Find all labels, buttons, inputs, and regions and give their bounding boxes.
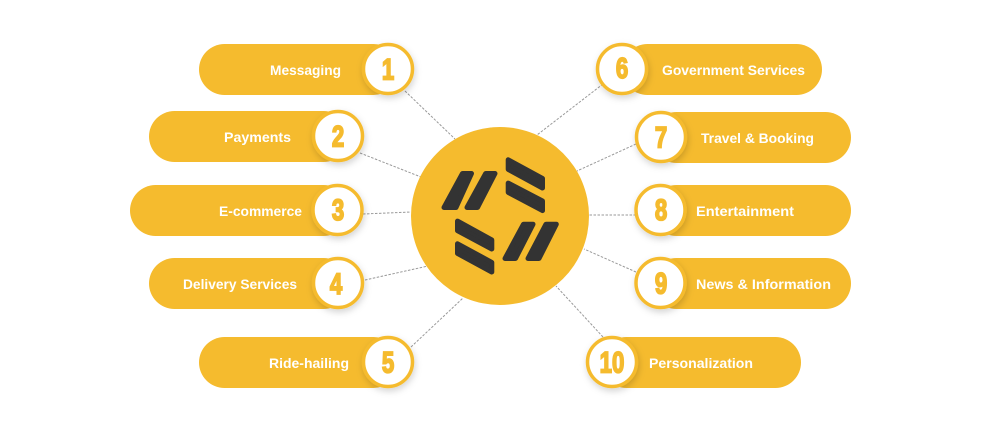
item 6: Government Services: 6 xyxy=(616,53,628,85)
item 3: E-commerce: 3 xyxy=(332,193,344,227)
item 2: Payments: 2 xyxy=(332,119,344,153)
item 9: News & Information: 9 xyxy=(655,266,667,300)
item 8: Entertainment xyxy=(636,185,851,236)
item 9: News & Information xyxy=(636,258,851,309)
item 3: E-commerce xyxy=(130,185,362,236)
item 3: E-commerce: E-commerce xyxy=(219,203,302,219)
item 10: Personalization: Personalization xyxy=(649,355,753,371)
item 5: Ride-hailing: Ride-hailing xyxy=(269,355,349,371)
item 10: Personalization: 10 xyxy=(600,345,624,379)
item 1: Messaging: Messaging xyxy=(270,62,341,78)
item 1: Messaging: 1 xyxy=(382,52,394,86)
item 7: Travel & Booking: Travel & Booking xyxy=(701,130,814,146)
item 2: Payments xyxy=(149,111,362,162)
item 4: Delivery Services: Delivery Services xyxy=(183,276,297,292)
item 6: Government Services xyxy=(598,44,822,95)
item 5: Ride-hailing: 5 xyxy=(382,345,394,379)
item 7: Travel & Booking: 7 xyxy=(655,120,667,154)
item 7: Travel & Booking xyxy=(636,112,851,163)
item 4: Delivery Services: 4 xyxy=(330,267,342,301)
item 2: Payments: Payments xyxy=(224,129,291,145)
item 1: Messaging xyxy=(199,44,412,95)
item 8: Entertainment: 8 xyxy=(655,193,667,227)
item 4: Delivery Services xyxy=(149,258,362,309)
item 9: News & Information: News & Information xyxy=(696,276,831,292)
item 10: Personalization xyxy=(588,337,801,388)
item 6: Government Services: Government Services xyxy=(662,62,805,78)
central logo circle xyxy=(411,127,589,305)
item 5: Ride-hailing xyxy=(199,337,412,388)
connector lines xyxy=(360,84,636,347)
item 8: Entertainment: Entertainment xyxy=(696,203,794,219)
icon: logo bars xyxy=(444,160,556,272)
